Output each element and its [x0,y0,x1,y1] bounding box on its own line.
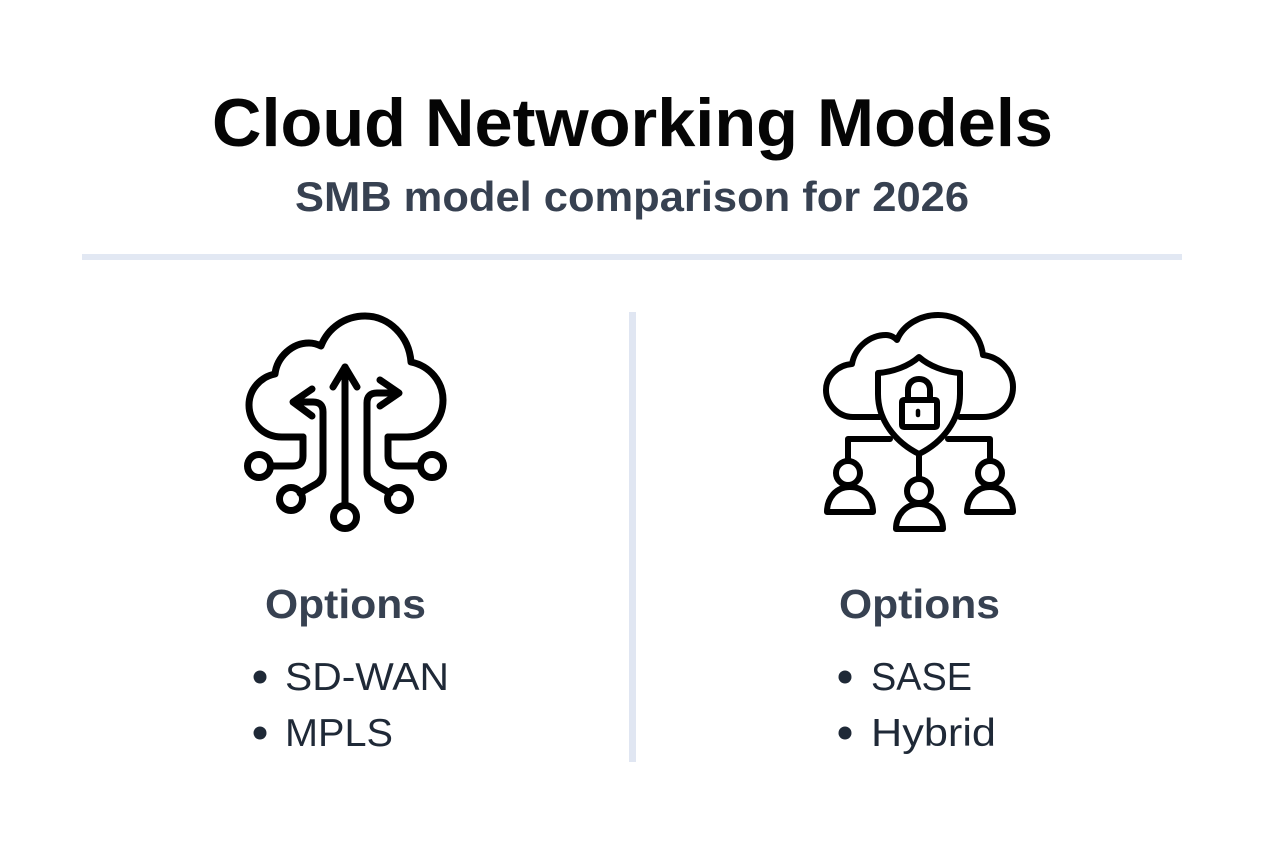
bullet list: Hybrid [871,712,996,755]
heading: options: Options [265,581,426,627]
heading: options: Options [839,581,1000,627]
bullet list [254,656,449,755]
bullet list [838,656,996,755]
title: Cloud Networking Models [212,85,1053,161]
bullet list: SD-WAN [285,656,449,699]
panel: left model [248,316,449,755]
subtitle: SMB model comparison for 2026 [295,173,969,220]
icon: cloud with network arrows [248,316,444,528]
bullet list: MPLS [285,712,393,755]
panel: right model [826,315,1013,755]
bullet list: SASE [871,656,972,699]
icon: cloud with security shield and users [826,315,1013,529]
